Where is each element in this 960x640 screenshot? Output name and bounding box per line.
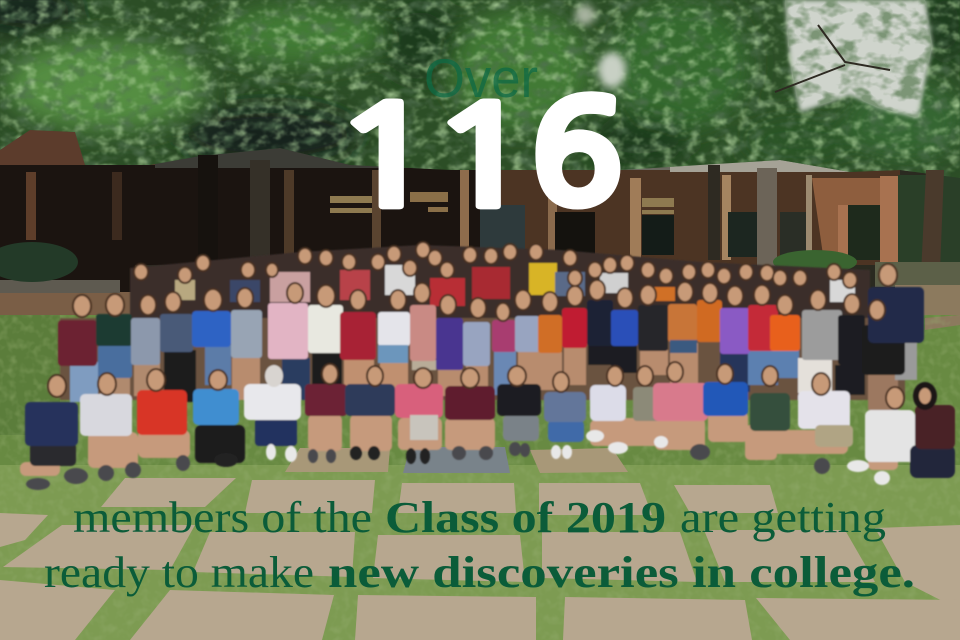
tree canopy bbox=[0, 0, 960, 180]
caption line one: are getting bbox=[680, 493, 886, 542]
sky gap near the number bbox=[575, 5, 626, 88]
big number 116: 1 bbox=[327, 88, 447, 229]
caption line two: ready to make bbox=[44, 548, 314, 597]
caption line two: new discoveries in college. bbox=[328, 548, 915, 597]
sky through the branches bbox=[770, 0, 940, 125]
standing row bbox=[58, 264, 924, 410]
brick archway bbox=[812, 178, 898, 262]
group of students bbox=[20, 242, 955, 490]
paving stones bbox=[0, 447, 960, 640]
big number 116: 1 bbox=[424, 88, 544, 229]
background: building, trees and sky bbox=[0, 0, 960, 320]
big number 116: 6 bbox=[530, 85, 624, 226]
big number 116 bbox=[327, 85, 624, 229]
ground: path, bushes and lawn bbox=[0, 240, 960, 640]
building bbox=[0, 128, 960, 267]
caption line two bbox=[44, 548, 915, 597]
seated row bbox=[20, 362, 955, 490]
caption line one: members of the bbox=[73, 493, 372, 542]
caption line one bbox=[73, 493, 886, 542]
"Over" heading: Over bbox=[424, 47, 538, 109]
back rows bbox=[130, 242, 870, 320]
caption bbox=[44, 493, 915, 597]
caption line one: Class of 2019 bbox=[385, 493, 666, 542]
tree trunks bbox=[198, 155, 944, 296]
